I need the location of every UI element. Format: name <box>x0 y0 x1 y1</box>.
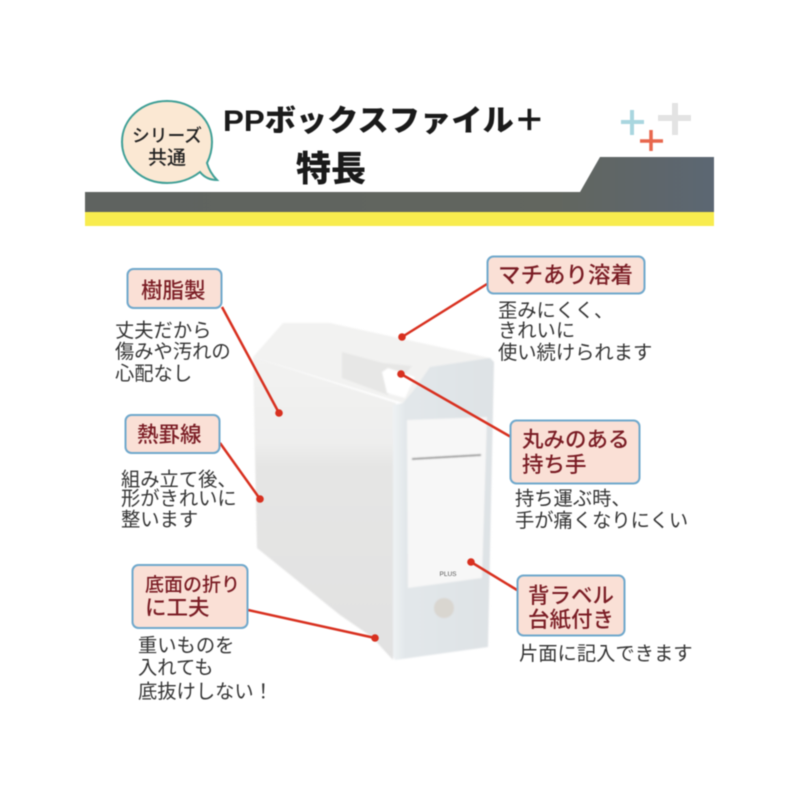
callout: bottom fold: 入れても <box>138 658 214 679</box>
callout: rounded handle: 持ち手 <box>522 453 587 477</box>
box spine <box>393 358 494 660</box>
handle cutout <box>382 368 415 398</box>
badge: series common speech bubble: シリーズ <box>132 125 202 146</box>
callout: bottom fold: 重いものを <box>138 635 234 657</box>
callout: resin <box>115 269 231 385</box>
callout: heat crease: 形がきれいに <box>121 488 237 510</box>
spine finger ring <box>434 598 454 618</box>
title: 特長 <box>296 150 366 189</box>
box back and flap <box>253 323 494 430</box>
icon: plus signs <box>621 103 691 151</box>
callout: rounded handle: 丸みのある <box>522 428 630 452</box>
label line <box>412 455 481 459</box>
callout: gusset welding: 使い続けられます <box>498 342 652 364</box>
callout: gusset welding: 歪みにくく、 <box>498 301 613 322</box>
title <box>223 105 545 189</box>
title: PPボックスファイル＋ <box>223 105 545 138</box>
spine label card <box>407 417 487 588</box>
callout: resin: 樹脂製 <box>141 279 206 303</box>
callout: heat crease: 熱罫線 <box>137 423 202 447</box>
callout: gusset welding: きれいに <box>498 321 575 342</box>
callout: resin: 心配なし <box>115 363 192 385</box>
callout: rounded handle: 持ち運ぶ時、 <box>515 488 631 510</box>
callout: spine label: 背ラベル <box>528 584 614 608</box>
inner recess <box>342 352 412 395</box>
header band <box>85 157 714 226</box>
callout: gusset welding <box>488 256 652 364</box>
callout: bottom fold <box>132 565 273 703</box>
callout: heat crease: 整います <box>121 509 198 531</box>
callout: resin: 傷みや汚れの <box>115 341 231 363</box>
callout: spine label: 片面に記入できます <box>519 643 693 665</box>
callout: rounded handle: 手が痛くなりにくい <box>515 510 688 532</box>
callout: spine label <box>518 576 693 665</box>
leader dots <box>256 333 475 642</box>
callout: bottom fold: 底面の折り <box>145 574 240 596</box>
PLUS logo: PLUS <box>440 571 457 578</box>
callout: spine label: 台紙付き <box>528 608 614 632</box>
box side panel <box>253 357 396 660</box>
leader lines <box>220 284 517 638</box>
callout: heat crease: 組み立て後、 <box>121 469 237 491</box>
badge: series common speech bubble: 共通 <box>148 147 186 169</box>
callout: gusset welding: マチあり溶着 <box>498 263 633 288</box>
callout: bottom fold: 底抜けしない！ <box>138 681 273 703</box>
product: box file <box>253 323 494 660</box>
callout: bottom fold: に工夫 <box>145 596 210 620</box>
callout: heat crease <box>121 415 237 531</box>
callout: resin: 丈夫だから <box>115 320 211 342</box>
badge: series common speech bubble <box>122 101 217 183</box>
callout: rounded handle <box>510 420 688 532</box>
